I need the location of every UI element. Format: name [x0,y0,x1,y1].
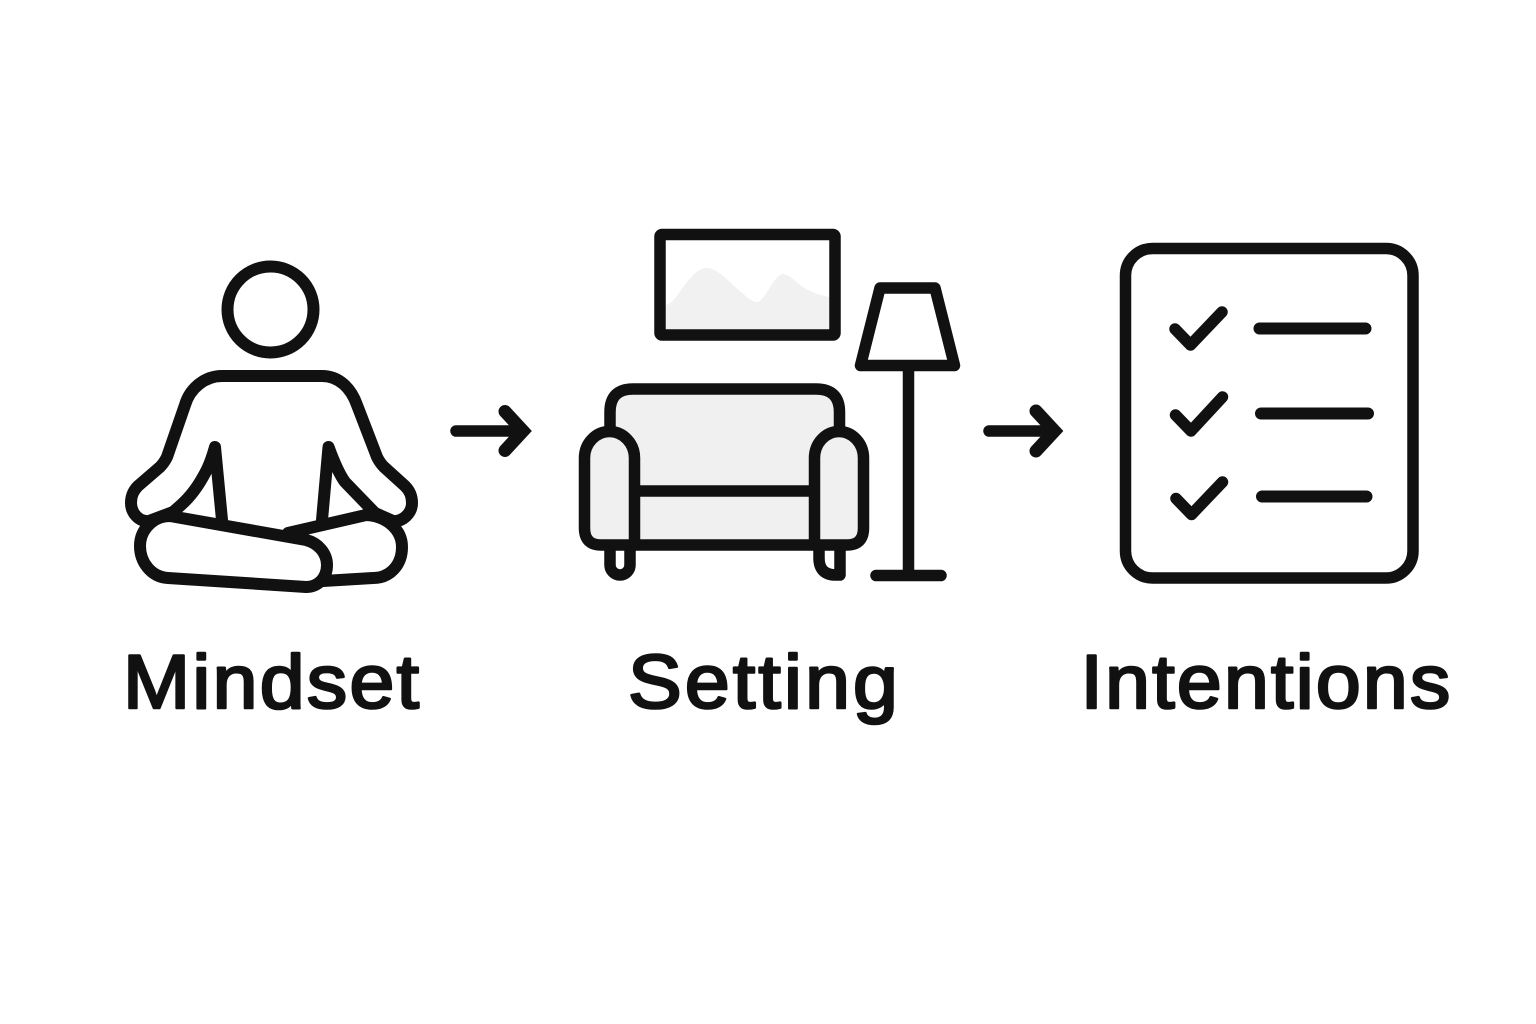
person front leg [140,516,327,587]
label: Setting: Setting [628,639,901,724]
chair legs [610,548,840,575]
lamp pole and base [876,366,941,576]
person torso and arms [131,376,412,521]
chair back outline [610,389,840,432]
chair back fill [610,389,840,545]
panel: intentions [1080,248,1453,724]
list lines [1260,328,1368,496]
chair seat lines [634,491,815,545]
arrow: setting to intentions [989,411,1054,451]
icon: armchair [584,389,864,575]
person back leg [288,515,402,581]
arrow: mindset to setting [456,412,523,450]
icon: framed picture [660,234,835,335]
left arm [584,432,634,545]
right arm [814,432,864,545]
picture landscape [666,268,830,330]
panel: mindset [123,266,421,724]
panel: setting [584,234,954,724]
picture frame [660,234,835,335]
check marks [1175,312,1222,514]
label: Mindset: Mindset [123,639,421,724]
icon: checklist [1126,248,1413,578]
checklist card [1126,248,1413,578]
icon: floor lamp [860,288,954,576]
icon: meditating person [131,266,412,587]
label: Intentions: Intentions [1080,639,1453,724]
person head [228,266,314,352]
lamp shade [860,288,954,366]
